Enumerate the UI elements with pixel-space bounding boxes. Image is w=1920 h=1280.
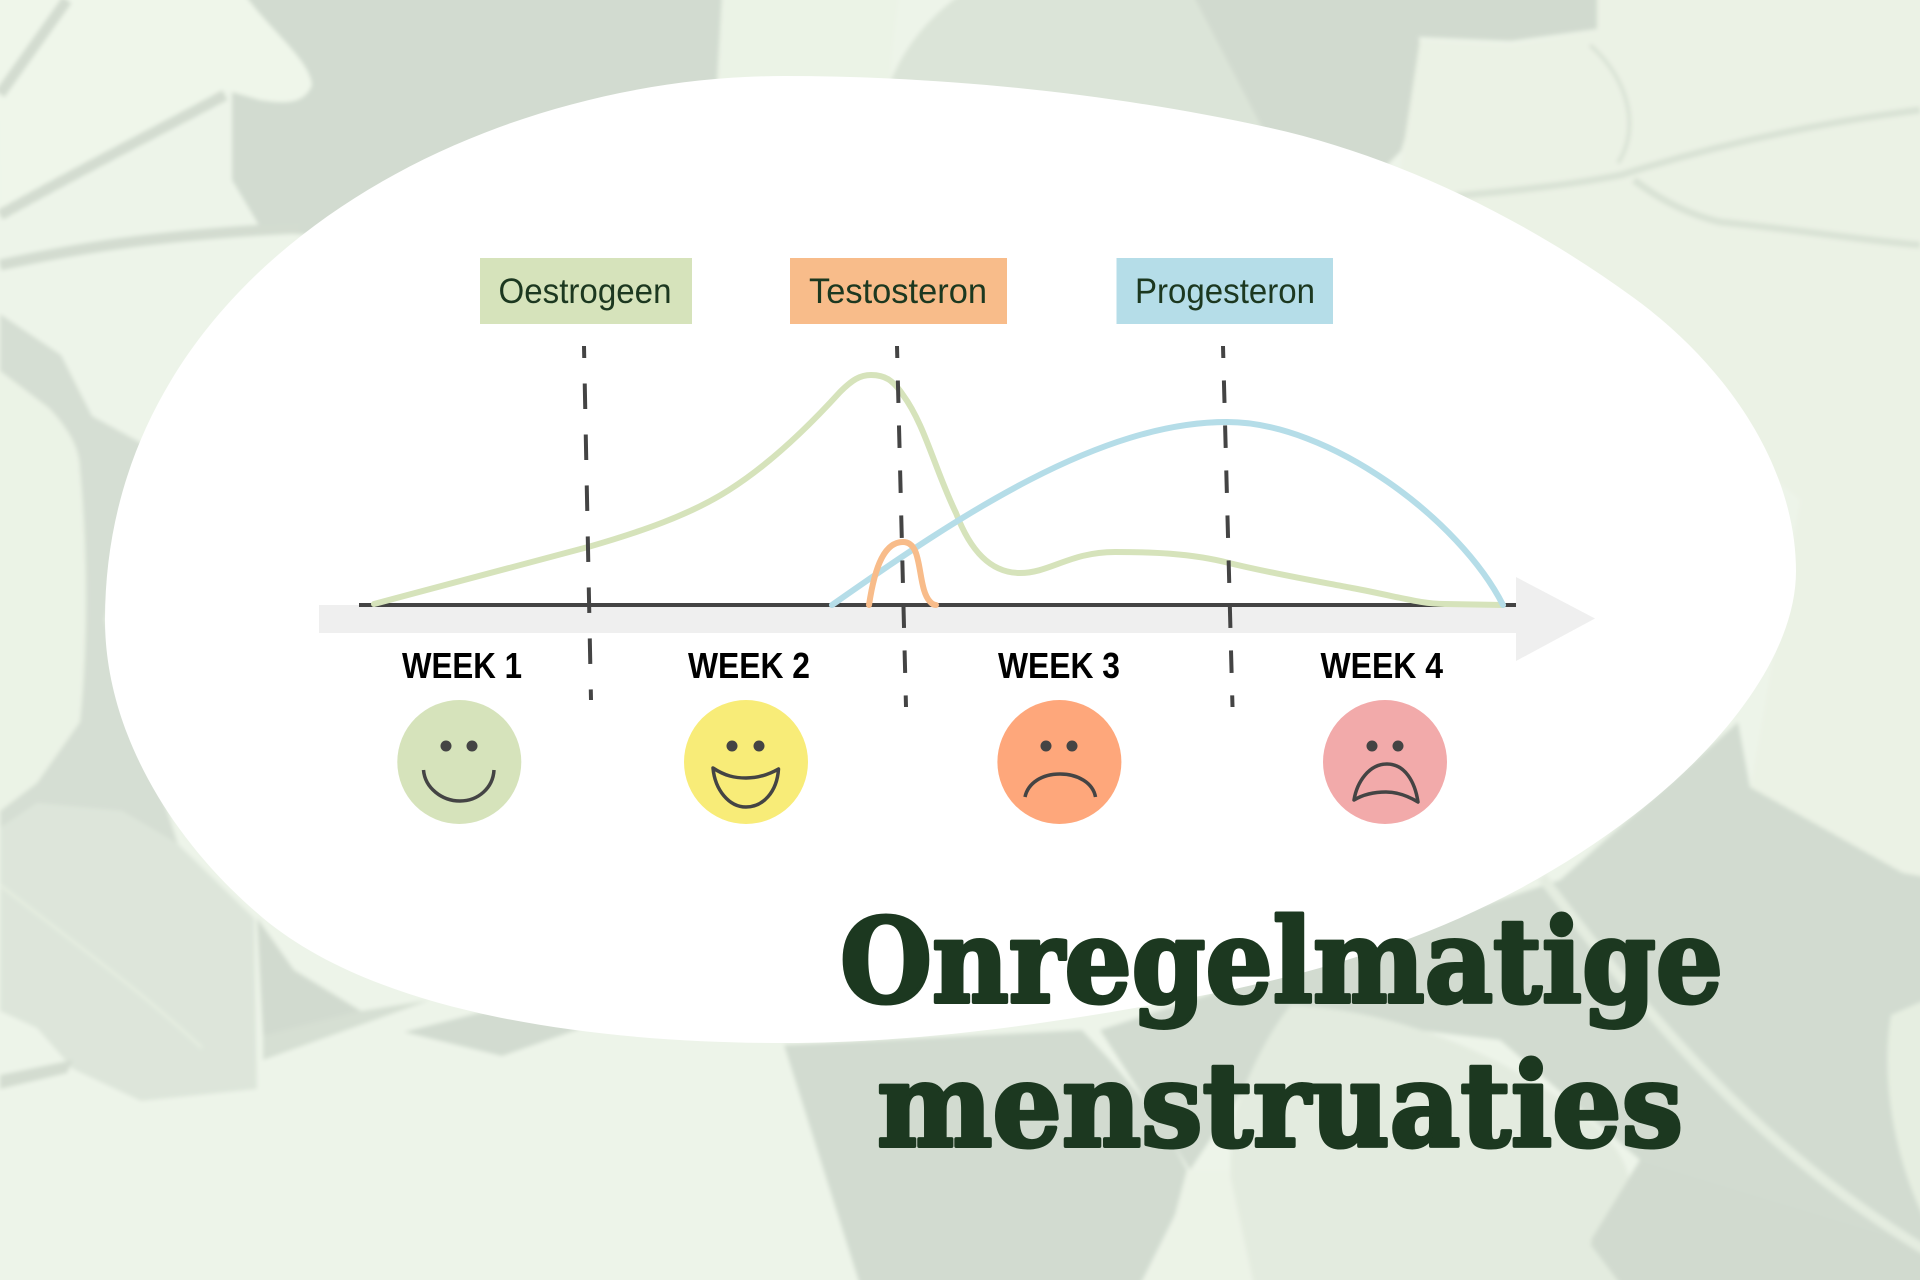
icon: laughing face: [684, 700, 808, 824]
icon: happy face: [397, 700, 521, 824]
week labels: [402, 645, 1443, 686]
dashed line: week 2-3: [897, 346, 906, 707]
icon: crying face: [1323, 700, 1447, 824]
axis line: [359, 603, 1516, 607]
title: menstruaties: [877, 1038, 1683, 1174]
curve: oestrogeen: [374, 375, 1503, 605]
label: Progesteron: [1116, 258, 1333, 324]
curve: progesteron: [832, 422, 1503, 605]
week labels: WEEK 3: [998, 645, 1120, 686]
timeline arrow: [319, 577, 1595, 661]
dashed line: week 3-4: [1223, 346, 1232, 707]
week labels: WEEK 4: [1320, 645, 1443, 686]
label: Testosteron: [790, 258, 1007, 324]
icon: sad face: [997, 700, 1121, 824]
curve: testosteron: [869, 542, 936, 605]
label: Testosteron: Testosteron: [809, 272, 987, 311]
week labels: WEEK 2: [688, 645, 810, 686]
label: Progesteron: Progesteron: [1135, 272, 1315, 311]
white blob panel: [105, 76, 1796, 1043]
label: Oestrogeen: [480, 258, 692, 324]
chart: hormone curves: [374, 375, 1503, 605]
title: [840, 894, 1723, 1174]
dashed line: week 1-2: [584, 346, 591, 700]
label: Oestrogeen: Oestrogeen: [498, 272, 672, 311]
title: Onregelmatige: [840, 894, 1723, 1030]
week labels: WEEK 1: [402, 645, 522, 686]
